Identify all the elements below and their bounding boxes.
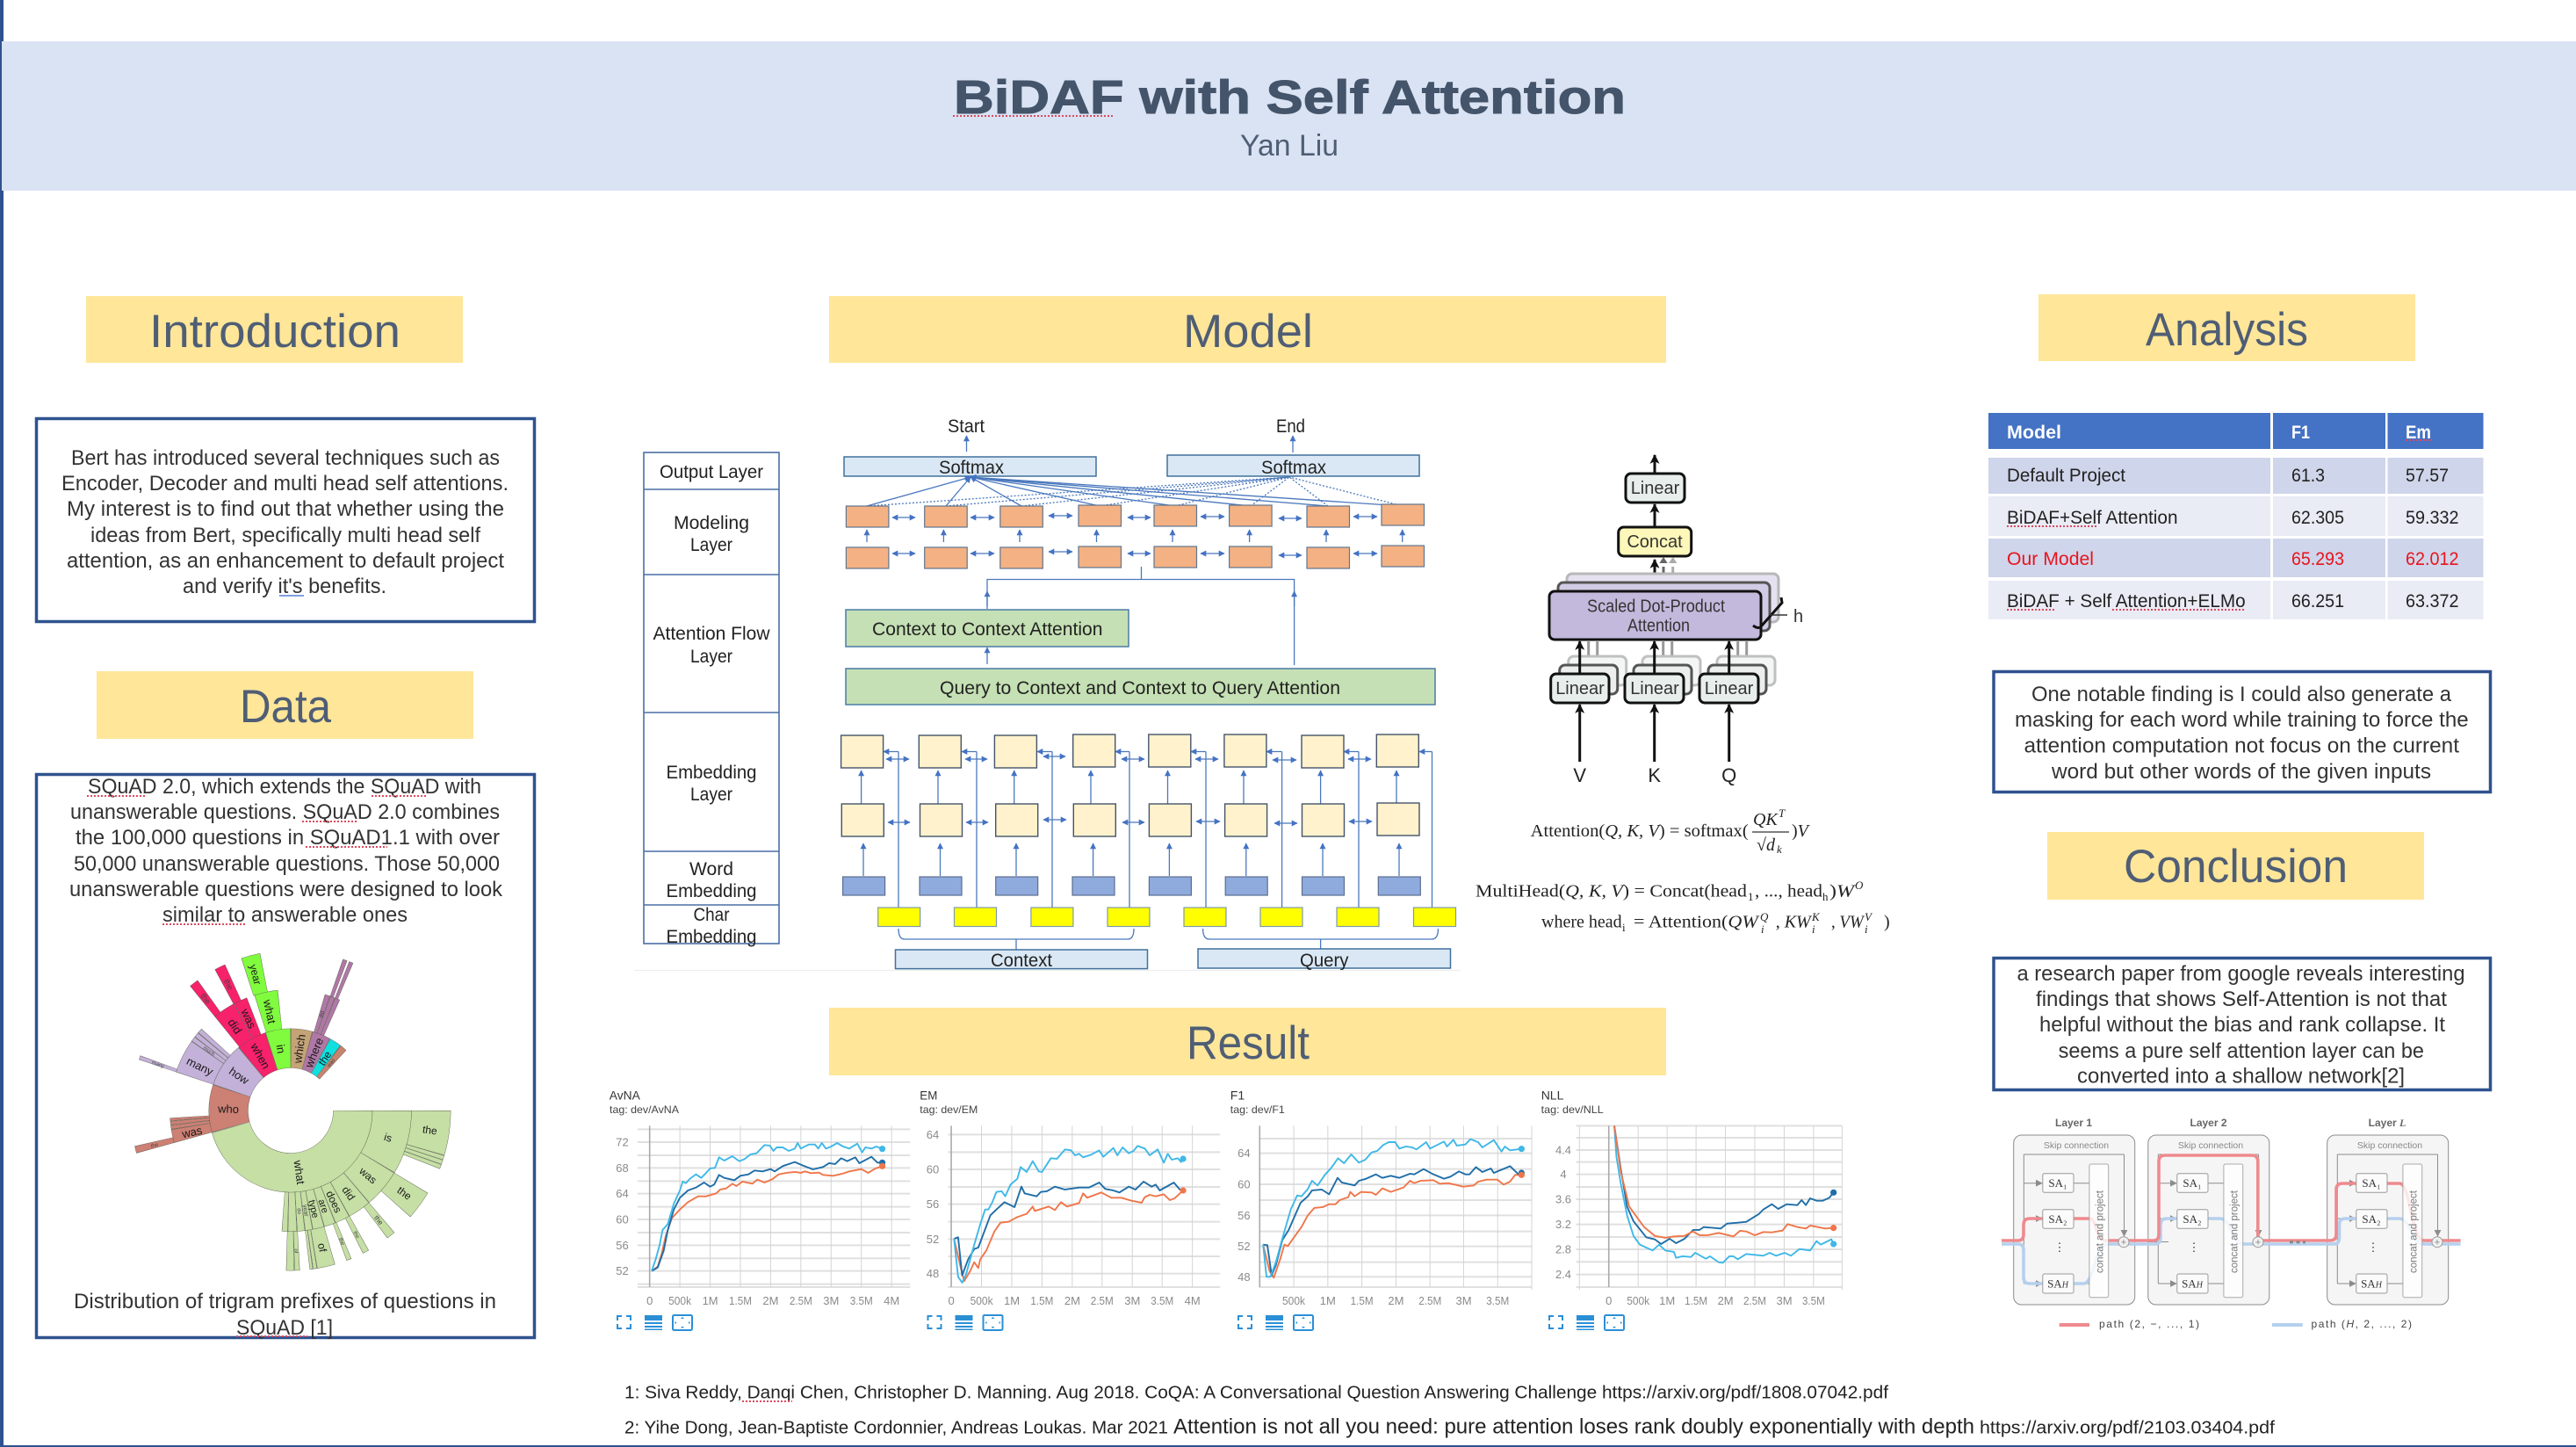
layer 1 contents: SA₁ <box>2048 1176 2067 1190</box>
line chart: EM: 0 <box>948 1294 955 1307</box>
sunburst word labels: type <box>306 1199 321 1219</box>
layer 2 contents: ⋮ <box>2189 1241 2199 1254</box>
panel: result heading <box>829 1008 1666 1075</box>
panel: introduction text: attention, as an enhancement to default project <box>67 549 504 573</box>
line chart: F1: tag: dev/F1 <box>1230 1103 1285 1116</box>
multi-head formula: V <box>1865 910 1873 923</box>
chart caption: SQuAD [1] <box>236 1316 333 1340</box>
panel: conclusion heading <box>2047 832 2424 900</box>
V K Q inputs: V <box>1573 764 1586 786</box>
panel: data <box>37 775 534 1340</box>
line chart: F1: 3M <box>1455 1294 1472 1307</box>
attention flow boxes <box>846 610 1435 705</box>
line chart: AvNA: 0 <box>646 1294 653 1307</box>
BiDAF architecture diagram <box>634 416 1461 971</box>
table header row: Em <box>2406 423 2431 443</box>
sunburst word labels: did <box>225 1017 245 1037</box>
multi-head formula: K <box>1811 910 1821 923</box>
line chart: NLL: 2.8 <box>1555 1242 1571 1256</box>
context and query inputs: Context <box>991 951 1052 971</box>
line chart: F1 <box>1230 1089 1532 1330</box>
data description text: unanswerable questions were designed to look <box>69 878 503 901</box>
line chart: AvNA: AvNA <box>610 1089 640 1103</box>
linear input blocks: Linear <box>1555 679 1605 698</box>
line chart: NLL: 3.2 <box>1555 1218 1571 1231</box>
embedding layer cells <box>841 734 1419 836</box>
sunburst word labels: year <box>247 963 263 986</box>
sunburst word labels: are <box>315 1198 330 1214</box>
data description text: SQuAD 2.0, which extends the SQuAD with <box>88 775 481 799</box>
line chart: AvNA: 56 <box>616 1239 629 1252</box>
line chart: F1: F1 <box>1230 1089 1245 1103</box>
sunburst word labels: year <box>301 1205 309 1218</box>
multi-head formula: O <box>1855 879 1864 892</box>
line chart: EM: 500k <box>971 1294 993 1307</box>
panel: notable finding: word but other words of the given inputs <box>2051 760 2431 784</box>
sunburst word labels: was <box>357 1164 379 1186</box>
attention flow boxes: Query to Context and Context to Query Attention <box>940 678 1340 698</box>
scaled dot-product attention stack: Attention <box>1627 617 1690 636</box>
table row: default project: Default Project <box>2007 466 2125 486</box>
table row: our model highlighted: 65.293 <box>2291 549 2344 569</box>
line chart: NLL: 3.5M <box>1802 1294 1825 1307</box>
line chart: F1: 52 <box>1237 1240 1251 1253</box>
line chart: NLL: NLL <box>1541 1089 1564 1103</box>
data description text: 50,000 unanswerable questions. Those 50,000 <box>74 852 500 876</box>
fan connections to softmax <box>867 477 1403 506</box>
line chart: EM: 2.5M <box>1091 1294 1114 1307</box>
softmax boxes <box>844 455 1419 478</box>
sunburst word labels: the <box>394 1184 414 1203</box>
layer 2 contents: SAH <box>2182 1277 2204 1290</box>
line chart: AvNA: 1.5M <box>729 1294 752 1307</box>
sunburst word labels: of <box>315 1241 329 1254</box>
data description text: similar to answerable ones <box>162 903 408 927</box>
layer L contents: concat and project <box>2408 1190 2419 1273</box>
layer 2 contents: Layer 2 <box>2190 1117 2227 1129</box>
line chart: NLL: 500k <box>1627 1294 1650 1307</box>
table row: default project: 57.57 <box>2406 466 2449 486</box>
attention flow boxes: Context to Context Attention <box>872 619 1103 640</box>
line chart: EM: 64 <box>927 1128 939 1141</box>
panel: conclusion text: helpful without the bias and rank collapse. It <box>2039 1013 2445 1037</box>
line chart: EM: 48 <box>927 1267 939 1280</box>
panel: introduction text: ideas from Bert, specifically multi head self <box>90 524 480 547</box>
multi-head formula: Q <box>1760 910 1769 923</box>
layer 1 contents: ⋮ <box>2053 1241 2066 1254</box>
line chart: NLL: 1M <box>1659 1294 1675 1307</box>
table header row: F1 <box>2291 423 2310 443</box>
sunburst word labels: was <box>238 1006 259 1031</box>
multi-head formula: i <box>1812 922 1815 936</box>
line chart: AvNA: 64 <box>616 1187 629 1200</box>
layer 1 contents: concat and project <box>2096 1190 2106 1273</box>
linear input blocks: Linear <box>1705 679 1754 698</box>
BiDAF layer labels table: Modeling <box>674 513 749 533</box>
sunburst word labels: the <box>150 1142 160 1149</box>
layer 1 contents: Layer 1 <box>2055 1117 2092 1129</box>
output labels and arrows: End <box>1276 416 1305 437</box>
output labels and arrows: Start <box>948 416 985 437</box>
table row: our model highlighted: 62.012 <box>2406 549 2459 569</box>
table row: our model highlighted: Our Model <box>2007 549 2094 569</box>
scaled dot-product attention stack <box>1549 574 1803 640</box>
multi-head formula: = Attention( QW <box>1634 913 1760 932</box>
line chart: F1: 500k <box>1282 1294 1305 1307</box>
line chart: F1: 48 <box>1237 1270 1251 1284</box>
panel: notable finding: masking for each word while training to force the <box>2015 708 2469 732</box>
title spellcheck squiggle <box>953 115 1115 117</box>
layer 1 contents: SA₂ <box>2048 1212 2067 1226</box>
panel: introduction text: Bert has introduced several techniques such as <box>71 446 500 470</box>
line chart: EM: 3M <box>1124 1294 1140 1307</box>
panel: model heading <box>829 296 1666 363</box>
title banner <box>2 41 2576 191</box>
panel: data heading: Data <box>240 681 331 733</box>
BiDAF layer labels table: Layer <box>690 785 732 805</box>
table row: BiDAF plus ELMo <box>1988 581 2484 619</box>
layer L contents: SAH <box>2361 1277 2383 1290</box>
sunburst word labels: was <box>326 1058 336 1069</box>
scaled attention formula: )V <box>1792 821 1811 841</box>
sunburst word labels: many <box>184 1054 216 1079</box>
chart caption <box>74 1290 496 1340</box>
references: 1: Siva Reddy, Danqi Chen, Christopher D. Manning. Aug 2018. CoQA: A Conversational Question Answering Challenge https://arxiv.org/pdf/1808.07042.pdf <box>624 1383 1888 1403</box>
sunburst word labels: the <box>337 1237 345 1247</box>
output labels and arrows <box>948 416 1305 452</box>
line chart: EM <box>920 1089 1220 1330</box>
concat block <box>1619 527 1692 591</box>
scaled attention formula: T <box>1779 807 1786 820</box>
BiDAF layer labels table: Layer <box>690 535 732 555</box>
multi-head formula: h <box>1822 890 1829 903</box>
references: 2: Yihe Dong, Jean-Baptiste Cordonnier, Andreas Loukas. Mar 2021 <box>624 1418 1168 1438</box>
table row: our model highlighted <box>1988 539 2484 577</box>
table row: BiDAF plus self attention: 62.305 <box>2291 508 2344 528</box>
line chart: AvNA: 68 <box>616 1161 629 1175</box>
line chart: AvNA: 3.5M <box>850 1294 873 1307</box>
panel: introduction heading <box>86 296 463 363</box>
panel: data heading <box>97 671 473 739</box>
line chart: F1: 2M <box>1388 1294 1403 1307</box>
panel: model heading: Model <box>1183 306 1313 358</box>
char embedding cells <box>878 908 1456 926</box>
sunburst word labels: many <box>151 1060 165 1069</box>
layer panel backgrounds <box>2014 1135 2449 1305</box>
sunburst word labels: the <box>198 992 213 1006</box>
scaled attention formula: QK <box>1753 810 1779 829</box>
sunburst word labels: how <box>227 1064 252 1088</box>
author: Yan Liu <box>1240 129 1339 163</box>
line chart: AvNA: 4M <box>884 1294 899 1307</box>
line chart: AvNA: 1M <box>703 1294 718 1307</box>
scaled attention formula <box>1531 807 1811 856</box>
line chart: EM: 52 <box>927 1233 939 1246</box>
line chart: AvNA: 52 <box>616 1264 629 1277</box>
BiDAF layer labels table: Char <box>694 905 729 925</box>
multi-head formula: i <box>1622 921 1626 934</box>
line chart: F1: 1M <box>1320 1294 1336 1307</box>
line chart: NLL: 0 <box>1605 1294 1612 1307</box>
linear input blocks: Linear <box>1630 679 1679 698</box>
figure legend: path (2, −, ..., 1) <box>2099 1318 2199 1330</box>
line chart: EM: 56 <box>927 1197 939 1211</box>
V K Q inputs: K <box>1648 764 1661 786</box>
sunburst word labels: which <box>291 1033 308 1065</box>
title: BiDAF with Self Attention <box>954 71 1626 124</box>
sunburst word labels <box>150 963 438 1254</box>
panel: conclusion heading: Conclusion <box>2124 841 2348 893</box>
line chart: AvNA <box>610 1089 910 1330</box>
layer L contents: + <box>2435 1237 2440 1248</box>
layer 1 contents: + <box>2121 1237 2126 1248</box>
panel: introduction heading: Introduction <box>149 306 400 358</box>
BiDAF layer labels table: Embedding <box>666 927 757 947</box>
attention merge connector <box>987 567 1295 665</box>
layer 2 contents: SA₁ <box>2183 1176 2202 1190</box>
V K Q inputs: Q <box>1721 764 1736 786</box>
layer 1 contents <box>2043 1117 2129 1298</box>
panel: conclusion text: converted into a shallow network[2] <box>2077 1065 2405 1089</box>
multi-head formula: , ..., head <box>1755 882 1822 901</box>
line chart: F1: 64 <box>1237 1147 1251 1160</box>
scaled dot-product attention stack: h <box>1793 607 1803 626</box>
layer 1 contents: SAH <box>2047 1277 2069 1290</box>
context and query inputs: Query <box>1300 951 1349 971</box>
line chart: EM: 3.5M <box>1151 1294 1173 1307</box>
sunburst word labels: is <box>383 1131 393 1145</box>
sunburst word labels: does <box>323 1189 344 1215</box>
line chart: NLL: 2.4 <box>1555 1268 1571 1281</box>
line chart: NLL: 3.6 <box>1555 1193 1571 1205</box>
ring 2: second words <box>148 967 434 1254</box>
layer L contents: Skip connection <box>2357 1140 2422 1151</box>
scaled attention formula: √d <box>1757 836 1776 855</box>
BiDAF layer labels table: Output Layer <box>660 462 763 482</box>
softmax boxes: Softmax <box>939 458 1004 478</box>
sunburst word labels: where <box>302 1036 326 1070</box>
data description text: unanswerable questions. SQuAD 2.0 combines <box>70 800 500 824</box>
multi-head formula: , VW <box>1831 913 1865 932</box>
BiDAF layer labels table: Embedding <box>666 763 757 783</box>
line chart: NLL: 4 <box>1560 1168 1567 1181</box>
panel: notable finding: attention computation not focus on the current <box>2024 734 2459 758</box>
layer 2 contents: + <box>2255 1237 2261 1248</box>
BiDAF layer labels table: Embedding <box>666 881 757 901</box>
references: https://arxiv.org/pdf/2103.03404.pdf <box>1980 1418 2275 1438</box>
line chart: EM: 60 <box>927 1163 939 1176</box>
line chart: F1: 60 <box>1237 1177 1251 1191</box>
line chart: NLL: 2M <box>1718 1294 1734 1307</box>
sunburst word labels: in <box>274 1044 288 1054</box>
panel: notable finding: One notable finding is I could also generate a <box>2031 683 2452 706</box>
line chart: EM: 2M <box>1064 1294 1080 1307</box>
V K Q inputs <box>1573 764 1736 786</box>
table row: BiDAF plus ELMo: 63.372 <box>2406 591 2459 611</box>
table header row: Model <box>2007 423 2061 443</box>
layer L contents: SA₂ <box>2362 1212 2381 1226</box>
sunburst word labels: who <box>217 1102 239 1116</box>
table row: BiDAF plus self attention: 59.332 <box>2406 508 2459 528</box>
sunburst word labels: of <box>292 1248 298 1254</box>
line chart: NLL: 2.5M <box>1743 1294 1766 1307</box>
panel: analysis heading: Analysis <box>2146 304 2308 356</box>
sunburst word labels: did <box>319 1010 326 1019</box>
line chart: EM: EM <box>920 1089 937 1103</box>
multi-head formula: , KW <box>1776 913 1813 932</box>
line chart: AvNA: 60 <box>616 1212 629 1226</box>
line chart: EM: 1.5M <box>1030 1294 1053 1307</box>
line chart: F1: 1.5M <box>1351 1294 1374 1307</box>
multi-head attention diagram <box>1549 455 1803 786</box>
sunburst word labels: what <box>261 998 278 1025</box>
ring 3: third words <box>93 913 488 1308</box>
sunburst word labels: much <box>202 1045 215 1058</box>
layer 2 contents: Skip connection <box>2178 1140 2243 1151</box>
multi-head formula <box>1476 879 1890 936</box>
multi-head formula: i <box>1865 922 1868 936</box>
layer 1 contents: Skip connection <box>2044 1140 2109 1151</box>
path highlights <box>2002 1155 2461 1284</box>
table header row <box>1988 413 2484 449</box>
line chart: AvNA: 2M <box>762 1294 778 1307</box>
line chart: F1: 2.5M <box>1418 1294 1441 1307</box>
figure legend: path (H, 2, ..., 2) <box>2312 1318 2412 1330</box>
panel: result heading: Result <box>1187 1017 1310 1069</box>
bottom page edge line <box>0 1445 2576 1447</box>
table row: BiDAF plus ELMo: 66.251 <box>2291 591 2344 611</box>
sunburst chart of trigram prefixes <box>93 913 488 1308</box>
sunburst word labels: do <box>296 1208 301 1215</box>
panel: conclusion text <box>1994 958 2491 1089</box>
modeling layer LSTM cells <box>846 504 1425 568</box>
panel: conclusion text: findings that shows Self-Attention is not that <box>2036 988 2447 1011</box>
line chart: NLL: 1.5M <box>1685 1294 1707 1307</box>
attention formulas <box>1476 807 1890 936</box>
table row: default project: 61.3 <box>2291 466 2325 486</box>
context and query inputs <box>634 929 1461 971</box>
line chart: AvNA: 72 <box>616 1135 629 1149</box>
layer L contents <box>2356 1117 2443 1298</box>
sunburst word labels: what <box>291 1159 307 1185</box>
data description text: the 100,000 questions in SQuAD1.1 with over <box>76 826 500 850</box>
BiDAF layer labels table: Attention Flow <box>653 624 770 644</box>
line chart: NLL: tag: dev/NLL <box>1541 1103 1604 1116</box>
line chart: AvNA: tag: dev/AvNA <box>610 1103 679 1116</box>
left page edge line <box>0 0 4 1447</box>
panel: notable finding <box>1994 671 2491 792</box>
sunburst word labels: was <box>180 1124 204 1141</box>
panel: conclusion text: seems a pure self attention layer can be <box>2059 1039 2424 1063</box>
concat block: Concat <box>1627 532 1683 552</box>
sunburst word labels: the <box>315 1048 334 1067</box>
sunburst word labels: the <box>222 978 235 991</box>
layer L contents: Layer L <box>2369 1117 2406 1129</box>
linear input blocks <box>1551 640 1775 762</box>
ring 1: first words <box>203 1023 379 1198</box>
panel: analysis heading <box>2038 294 2415 361</box>
word embedding cells <box>843 877 1420 895</box>
table row: BiDAF plus self attention: BiDAF+Self Attention <box>2007 508 2178 528</box>
multi-head formula: where head <box>1541 913 1622 932</box>
line chart: EM: tag: dev/EM <box>920 1103 978 1116</box>
sunburst word labels: the <box>422 1123 438 1138</box>
table row: BiDAF plus self attention <box>1988 496 2484 536</box>
table row: BiDAF plus ELMo: BiDAF + Self Attention+ELMo <box>2007 591 2246 611</box>
sunburst word labels: the <box>352 1231 360 1240</box>
line chart: F1: 56 <box>1237 1209 1251 1222</box>
line chart: NLL: 4.4 <box>1555 1144 1571 1156</box>
chart caption: Distribution of trigram prefixes of questions in <box>74 1290 496 1313</box>
line chart: F1: 3.5M <box>1486 1294 1509 1307</box>
scaled attention formula: Attention(Q, K, V) = softmax( <box>1531 821 1749 841</box>
multi-head formula: MultiHead( Q, K, V ) = Concat(head <box>1476 882 1747 901</box>
line chart: AvNA: 500k <box>668 1294 692 1307</box>
scaled dot-product attention stack: Scaled Dot-Product <box>1587 597 1725 617</box>
sunburst word labels: when <box>248 1040 273 1071</box>
multi-head formula: )W <box>1829 882 1857 901</box>
layer L contents: SA₁ <box>2362 1176 2381 1190</box>
scaled attention formula: k <box>1777 843 1782 856</box>
top linear output: Linear <box>1631 479 1680 498</box>
line chart: AvNA: 2.5M <box>790 1294 812 1307</box>
line chart: EM: 1M <box>1004 1294 1020 1307</box>
layer L contents: ⋮ <box>2368 1241 2378 1254</box>
references: Attention is not all you need: pure attention loses rank doubly exponentially with depth <box>1173 1415 1974 1439</box>
results table <box>1988 413 2484 619</box>
data description text <box>69 775 503 927</box>
multi-head formula: i <box>1761 922 1764 936</box>
layer 2 contents: SA₂ <box>2183 1212 2202 1226</box>
line chart: AvNA: 3M <box>823 1294 839 1307</box>
BiDAF layer labels table: Layer <box>690 647 732 667</box>
panel: conclusion text: a research paper from google reveals interesting <box>2017 962 2464 986</box>
top linear output <box>1626 455 1685 527</box>
panel: introduction text: My interest is to find out that whether using the <box>67 497 504 521</box>
embedding layer connections <box>862 752 1432 908</box>
layer 2 contents: concat and project <box>2229 1190 2240 1273</box>
self-attention skip connection figure <box>2002 1117 2461 1330</box>
softmax boxes: Softmax <box>1261 458 1326 478</box>
references <box>624 1383 2275 1439</box>
panel: introduction text: Encoder, Decoder and multi head self attentions. <box>61 472 509 496</box>
figure legend <box>2060 1318 2412 1330</box>
sunburst word labels: did <box>339 1184 357 1203</box>
multi-head formula: ) <box>1884 913 1890 932</box>
line chart: EM: 4M <box>1185 1294 1201 1307</box>
multi-head formula: 1 <box>1748 890 1753 903</box>
line chart: NLL: 3M <box>1776 1294 1793 1307</box>
layer 2 contents <box>2177 1117 2263 1298</box>
BiDAF layer labels table <box>644 452 779 947</box>
sunburst word labels: the <box>372 1214 385 1226</box>
table row: default project <box>1988 458 2484 494</box>
line chart: NLL <box>1541 1089 1842 1330</box>
panel: introduction text <box>37 418 534 622</box>
panel: introduction text: and verify it's benefits. <box>183 575 386 598</box>
BiDAF layer labels table: Word <box>689 859 733 879</box>
